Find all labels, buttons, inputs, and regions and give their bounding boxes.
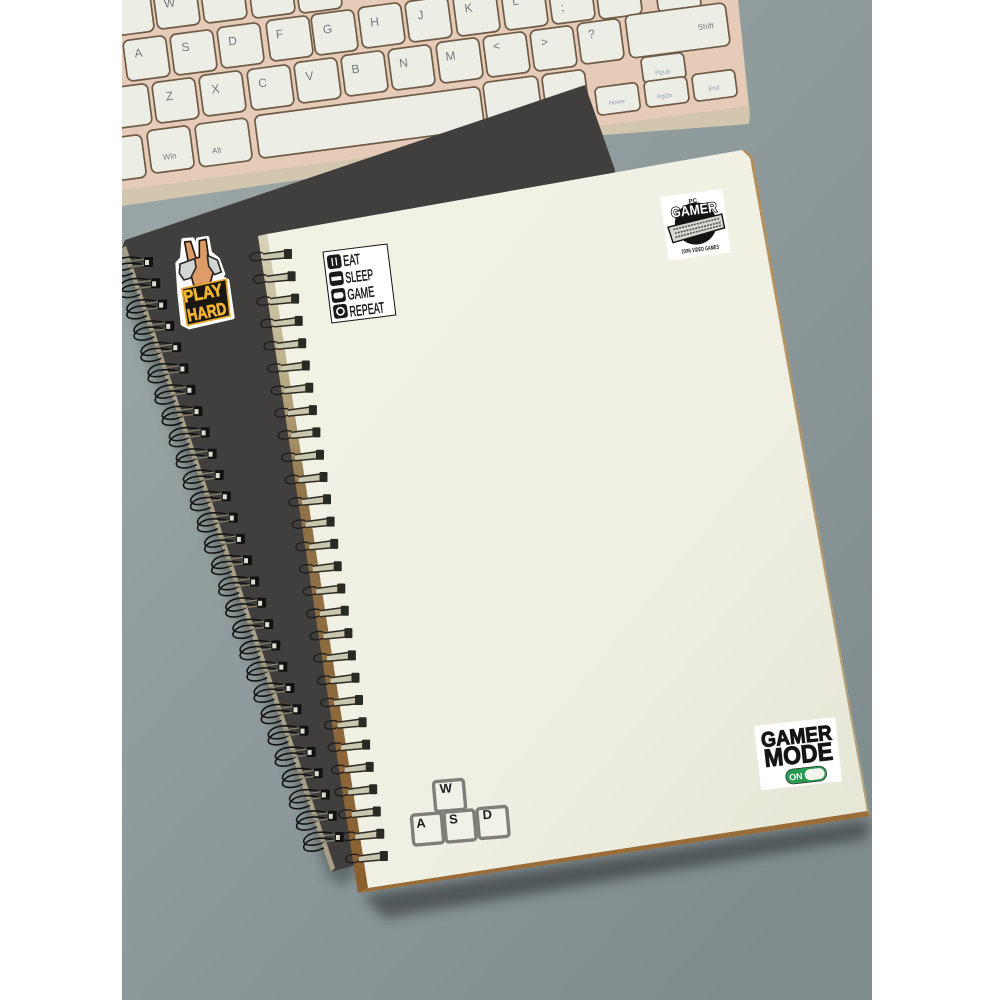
key legends: G <box>322 22 333 37</box>
keyboard drawing <box>667 214 726 243</box>
key legends: D <box>227 34 238 49</box>
sticker: play hard <box>177 238 233 327</box>
icon: bed <box>329 271 344 286</box>
gamer word: GAMER <box>670 199 718 221</box>
key legends: H <box>369 15 380 30</box>
black notebook spine edge <box>122 246 335 872</box>
key legends: Win <box>162 151 177 162</box>
sticker: pc gamer <box>660 189 731 260</box>
game controller <box>179 255 221 280</box>
key legends: Z <box>165 89 174 103</box>
key legends: PgDn <box>657 93 673 101</box>
key legends: Alt <box>212 145 223 156</box>
black notebook spiral binding <box>113 257 344 851</box>
key legends: S <box>181 40 190 54</box>
key legends: N <box>398 56 409 71</box>
eat sleep game repeat words: SLEEP <box>344 267 374 287</box>
white notebook spiral binding <box>250 249 388 863</box>
key legends: End <box>708 85 720 93</box>
sticker label: HARD <box>186 298 228 325</box>
eat sleep game repeat words: GAME <box>346 284 375 304</box>
sticker: wasd keys <box>411 779 509 845</box>
key s: S <box>448 811 459 827</box>
white notebook shadow <box>362 820 868 918</box>
key legends: ; <box>560 0 565 14</box>
icon: repeat <box>333 303 348 319</box>
sticker label: PLAY <box>182 279 224 307</box>
key legends: PgUp <box>655 69 671 77</box>
icon: gamepad <box>331 288 346 303</box>
sticker label <box>182 279 230 325</box>
key legends: K <box>464 1 473 15</box>
keyboard <box>88 0 750 206</box>
key legends: M <box>445 48 456 64</box>
key legends: V <box>305 69 314 83</box>
eat sleep game repeat words: EAT <box>342 251 361 270</box>
sticker: eat sleep game repeat <box>323 244 396 323</box>
key legends: Home <box>609 99 626 107</box>
key legends: A <box>134 46 143 60</box>
toggle switch: ON <box>789 771 803 782</box>
key legends: F <box>275 27 284 41</box>
key legends <box>134 0 720 162</box>
hand <box>185 239 214 286</box>
black notebook shadow <box>118 260 360 885</box>
mode word: MODE <box>763 738 834 773</box>
white notebook <box>258 150 870 893</box>
icon: cutlery <box>326 254 342 269</box>
key legends: Shift <box>697 21 715 32</box>
key legends: C <box>257 76 268 91</box>
black semicircle <box>674 202 716 244</box>
sticker: gamer mode on <box>754 717 842 790</box>
black notebook <box>122 85 615 872</box>
tagline: 100% VIDEO GAMES <box>681 245 720 256</box>
key legends: J <box>417 8 424 22</box>
eat sleep game repeat words <box>343 254 384 317</box>
key a: A <box>416 815 427 831</box>
key legends: ? <box>587 27 596 41</box>
photo background <box>122 0 872 1000</box>
key legends: < <box>492 39 501 53</box>
key d: D <box>482 807 493 822</box>
key legends: B <box>351 62 360 76</box>
key w: W <box>439 780 453 796</box>
product photo <box>122 0 872 1000</box>
gamer word: GAMER <box>760 722 833 752</box>
pc label: PC <box>688 198 698 205</box>
key legends: X <box>211 82 220 96</box>
key legends: > <box>540 35 549 49</box>
eat sleep game repeat words: REPEAT <box>349 299 385 321</box>
